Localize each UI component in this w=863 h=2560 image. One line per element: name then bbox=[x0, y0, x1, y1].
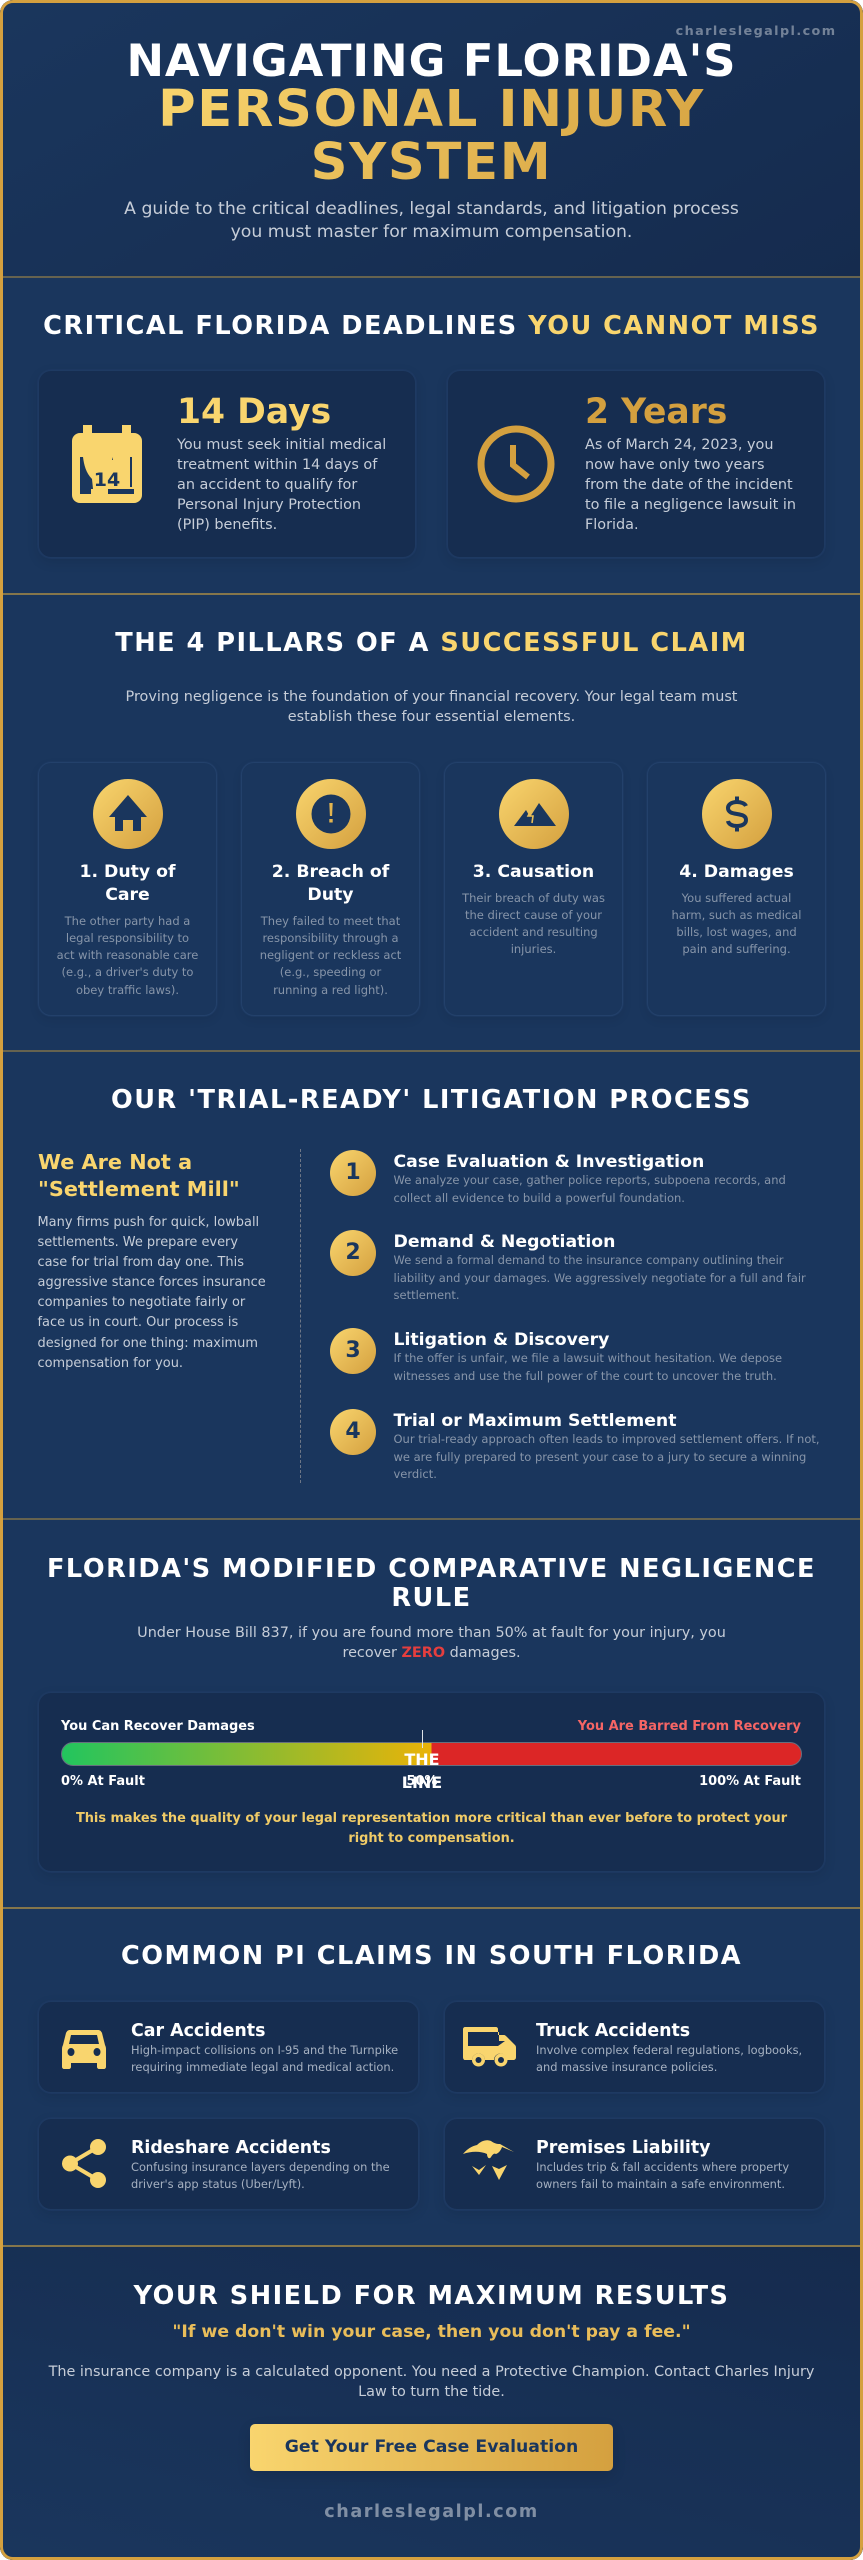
icon: mountains bbox=[499, 779, 569, 849]
step title: Demand & Negotiation bbox=[394, 1232, 615, 1252]
negligence heading bbox=[47, 1554, 816, 1613]
stat: 2 years: 2 Years bbox=[585, 392, 727, 432]
panel: fault scale bbox=[38, 1692, 825, 1872]
marker: the line: LINE bbox=[402, 1773, 442, 1792]
subtitle: A guide to the critical deadlines, legal standards, and litigation process bbox=[124, 198, 739, 218]
label: barred: You Are Barred From Recovery bbox=[578, 1719, 801, 1734]
settlement mill text: companies to negotiate fairly or bbox=[38, 1295, 245, 1310]
settlement mill text: compensation for you. bbox=[38, 1356, 183, 1371]
step text: We analyze your case, gather police reports, subpoena records, and bbox=[394, 1173, 786, 1187]
section: comparative negligence bbox=[0, 1519, 863, 1908]
description: (e.g., speeding or bbox=[280, 965, 381, 979]
description: driver's app status (Uber/Lyft). bbox=[131, 2177, 305, 2191]
title bbox=[272, 862, 390, 904]
pillars intro bbox=[126, 689, 738, 725]
footer url: charleslegalpl.com bbox=[324, 2502, 539, 2522]
settlement mill heading bbox=[38, 1150, 240, 1201]
description bbox=[131, 2043, 398, 2074]
stat: 14 days: 14 Days bbox=[177, 392, 331, 432]
step title: Litigation & Discovery bbox=[394, 1330, 609, 1350]
description: act with reasonable care bbox=[57, 948, 198, 962]
title: Care bbox=[105, 884, 150, 904]
claim: premises bbox=[444, 2118, 825, 2210]
description: (e.g., a driver's duty to bbox=[62, 965, 193, 979]
settlement mill heading: "Settlement Mill" bbox=[38, 1177, 240, 1201]
description bbox=[462, 890, 605, 956]
step text bbox=[394, 1173, 786, 1205]
description: legal responsibility to bbox=[66, 931, 189, 945]
step text bbox=[394, 1432, 820, 1481]
description: They failed to meet that bbox=[261, 914, 400, 928]
description: the direct cause of your bbox=[465, 908, 602, 922]
title bbox=[79, 862, 176, 904]
step text: verdict. bbox=[394, 1467, 437, 1481]
section: common claims bbox=[0, 1908, 863, 2246]
number 4: 4 bbox=[345, 1419, 361, 1444]
step text: witnesses and use the full power of the court to uncover the truth. bbox=[394, 1369, 777, 1383]
cta heading: YOUR SHIELD FOR MAXIMUM RESULTS bbox=[134, 2280, 730, 2310]
description: You must seek initial medical bbox=[177, 437, 386, 453]
number 2: 2 bbox=[345, 1240, 361, 1265]
main title bbox=[126, 34, 737, 192]
negligence heading: FLORIDA'S MODIFIED COMPARATIVE NEGLIGENCE bbox=[47, 1554, 816, 1584]
pillars intro: establish these four essential elements. bbox=[288, 709, 575, 725]
step 1 bbox=[330, 1150, 786, 1205]
card: 2 years bbox=[447, 370, 825, 558]
title: Rideshare Accidents bbox=[131, 2138, 331, 2158]
settlement mill text: settlements. We prepare every bbox=[38, 1235, 238, 1250]
claim: car bbox=[38, 2001, 419, 2093]
main title: PERSONAL INJURY bbox=[158, 78, 705, 138]
claim: truck bbox=[444, 2001, 825, 2093]
title: Car Accidents bbox=[131, 2021, 265, 2041]
step text: If the offer is unfair, we file a lawsuit without hesitation. We depose bbox=[394, 1351, 782, 1365]
cta button bbox=[250, 2424, 613, 2471]
icon: dollar bbox=[702, 779, 772, 849]
title: Duty bbox=[307, 884, 354, 904]
description bbox=[57, 914, 198, 997]
number 4 bbox=[330, 1409, 376, 1455]
icon: alert bbox=[296, 779, 366, 849]
description: bills, lost wages, and bbox=[676, 925, 797, 939]
label: 100 percent: 100% At Fault bbox=[699, 1774, 801, 1789]
description: owners fail to maintain a safe environment. bbox=[536, 2177, 785, 2191]
number 1: 1 bbox=[345, 1160, 361, 1185]
icon: car bbox=[62, 2030, 106, 2069]
takeaway note: right to compensation. bbox=[348, 1831, 515, 1846]
icon: house bbox=[93, 779, 163, 849]
takeaway note bbox=[76, 1811, 788, 1846]
step text bbox=[394, 1351, 782, 1383]
cta text: The insurance company is a calculated opponent. You need a Protective Champion. Contact Charles Injury bbox=[49, 2364, 814, 2380]
negligence intro: recover ZERO damages. bbox=[342, 1645, 521, 1661]
description: and massive insurance policies. bbox=[536, 2060, 717, 2074]
description: running a red light). bbox=[273, 983, 388, 997]
icon: share bbox=[62, 2139, 106, 2188]
description bbox=[585, 437, 796, 533]
label: recover: You Can Recover Damages bbox=[61, 1719, 255, 1734]
step text: Our trial-ready approach often leads to improved settlement offers. If not, bbox=[394, 1432, 820, 1446]
icon: truck bbox=[463, 2027, 516, 2066]
description bbox=[672, 890, 801, 956]
icon: calendar: 14 bbox=[94, 469, 120, 491]
step text: we are fully prepared to present your case to a jury to secure a winning bbox=[394, 1450, 806, 1464]
step text: collect all evidence to build a powerful foundation. bbox=[394, 1191, 685, 1205]
description: harm, such as medical bbox=[672, 908, 801, 922]
settlement mill text bbox=[38, 1215, 266, 1371]
section: call to action bbox=[0, 2246, 863, 2560]
label: 50 percent: 50% bbox=[406, 1774, 438, 1789]
title: 1. Duty of bbox=[79, 862, 176, 882]
subtitle bbox=[124, 198, 739, 242]
description: now have only two years bbox=[585, 457, 765, 473]
settlement mill text: face us in court. Our process is bbox=[38, 1315, 238, 1330]
pillar 4 bbox=[647, 762, 826, 1016]
description: from the date of the incident bbox=[585, 477, 793, 493]
description: an accident to qualify for bbox=[177, 477, 357, 493]
step text bbox=[394, 1253, 806, 1302]
claim: rideshare bbox=[38, 2118, 419, 2210]
number 2 bbox=[330, 1230, 376, 1276]
description: requiring immediate legal and medical action. bbox=[131, 2060, 394, 2074]
icon: calendar bbox=[72, 425, 142, 503]
pillars intro: Proving negligence is the foundation of your financial recovery. Your legal team must bbox=[126, 689, 737, 705]
description: Confusing insurance layers depending on the bbox=[131, 2160, 390, 2174]
step 3 bbox=[330, 1328, 782, 1383]
description: Florida. bbox=[585, 517, 639, 533]
number 1 bbox=[330, 1150, 376, 1196]
pillar 1 bbox=[38, 762, 217, 1016]
title: 4. Damages bbox=[679, 862, 794, 882]
settlement mill heading: We Are Not a bbox=[38, 1150, 192, 1174]
negligence intro: Under House Bill 837, if you are found more than 50% at fault for your injury, you bbox=[137, 1625, 726, 1641]
fault bar bbox=[61, 1742, 802, 1766]
icon: premises hazard bbox=[463, 2140, 514, 2180]
icon: clock bbox=[478, 426, 554, 502]
step text: settlement. bbox=[394, 1288, 460, 1302]
description: Includes trip & fall accidents where property bbox=[536, 2160, 789, 2174]
marker: the line bbox=[402, 1730, 442, 1792]
description: (PIP) benefits. bbox=[177, 517, 277, 533]
process heading: OUR 'TRIAL-READY' LITIGATION PROCESS bbox=[111, 1085, 752, 1115]
description: to file a negligence lawsuit in bbox=[585, 497, 796, 513]
description: High-impact collisions on I-95 and the Turnpike bbox=[131, 2043, 398, 2057]
settlement mill text: Many firms push for quick, lowball bbox=[38, 1215, 259, 1230]
dashed divider bbox=[300, 1149, 301, 1483]
number 3 bbox=[330, 1328, 376, 1374]
description: As of March 24, 2023, you bbox=[585, 437, 773, 453]
description bbox=[131, 2160, 390, 2191]
marker: the line: THE bbox=[404, 1750, 440, 1769]
description: Their breach of duty was bbox=[462, 890, 605, 904]
description: Personal Injury Protection bbox=[177, 497, 361, 513]
description: accident and resulting bbox=[469, 925, 598, 939]
description: Involve complex federal regulations, logbooks, bbox=[536, 2043, 802, 2057]
section: critical deadlines bbox=[0, 277, 863, 594]
description: You suffered actual bbox=[682, 890, 791, 904]
deadlines heading: CRITICAL FLORIDA DEADLINES YOU CANNOT MISS bbox=[43, 311, 820, 341]
title: 2. Breach of bbox=[272, 862, 389, 882]
description: responsibility through a bbox=[262, 931, 399, 945]
pillars heading: THE 4 PILLARS OF A SUCCESSFUL CLAIM bbox=[115, 628, 748, 658]
cta button: Get Your Free Case Evaluation bbox=[285, 2437, 578, 2457]
cta text: Law to turn the tide. bbox=[358, 2384, 505, 2400]
step text: We send a formal demand to the insurance company outlining their bbox=[394, 1253, 784, 1267]
main title: SYSTEM bbox=[311, 132, 552, 192]
header section bbox=[0, 0, 863, 277]
description bbox=[536, 2159, 789, 2194]
title: Premises Liability bbox=[536, 2138, 711, 2158]
settlement mill text: aggressive stance forces insurance bbox=[38, 1275, 266, 1290]
main title: NAVIGATING FLORIDA'S bbox=[126, 34, 737, 87]
description bbox=[177, 437, 386, 533]
description: injuries. bbox=[511, 942, 556, 956]
label: 0 percent: 0% At Fault bbox=[61, 1774, 145, 1789]
section: four pillars bbox=[0, 594, 863, 1051]
guarantee quote: "If we don't win your case, then you don't pay a fee." bbox=[172, 2322, 691, 2342]
pillar 2 bbox=[241, 762, 420, 1016]
title: 3. Causation bbox=[473, 862, 594, 882]
settlement mill text: case for trial from day one. This bbox=[38, 1255, 244, 1270]
subtitle: you must master for maximum compensation. bbox=[231, 222, 632, 242]
step title: Trial or Maximum Settlement bbox=[394, 1411, 676, 1431]
negligence intro bbox=[137, 1625, 726, 1661]
description: obey traffic laws). bbox=[76, 983, 179, 997]
number 3: 3 bbox=[345, 1338, 361, 1363]
settlement mill text: designed for one thing: maximum bbox=[38, 1336, 258, 1351]
description: treatment within 14 days of bbox=[177, 457, 377, 473]
step 2 bbox=[330, 1230, 806, 1302]
description: negligent or reckless act bbox=[260, 948, 401, 962]
claims heading: COMMON PI CLAIMS IN SOUTH FLORIDA bbox=[121, 1941, 742, 1971]
step text: liability and your damages. We aggressively negotiate for a full and fair bbox=[394, 1271, 806, 1285]
title: Truck Accidents bbox=[536, 2021, 690, 2041]
negligence heading: RULE bbox=[391, 1583, 472, 1613]
description: pain and suffering. bbox=[682, 942, 791, 956]
description: The other party had a bbox=[65, 914, 190, 928]
pillar 3 bbox=[444, 762, 623, 1016]
description bbox=[536, 2043, 802, 2074]
card: 14 days bbox=[38, 370, 416, 558]
step title: Case Evaluation & Investigation bbox=[394, 1152, 704, 1172]
description bbox=[260, 914, 401, 997]
website watermark: charleslegalpl.com bbox=[676, 24, 836, 39]
takeaway note: This makes the quality of your legal representation more critical than ever before to protect your bbox=[76, 1811, 787, 1826]
section: litigation process bbox=[0, 1051, 863, 1519]
step 4 bbox=[330, 1409, 820, 1481]
cta text bbox=[0, 2362, 863, 2402]
